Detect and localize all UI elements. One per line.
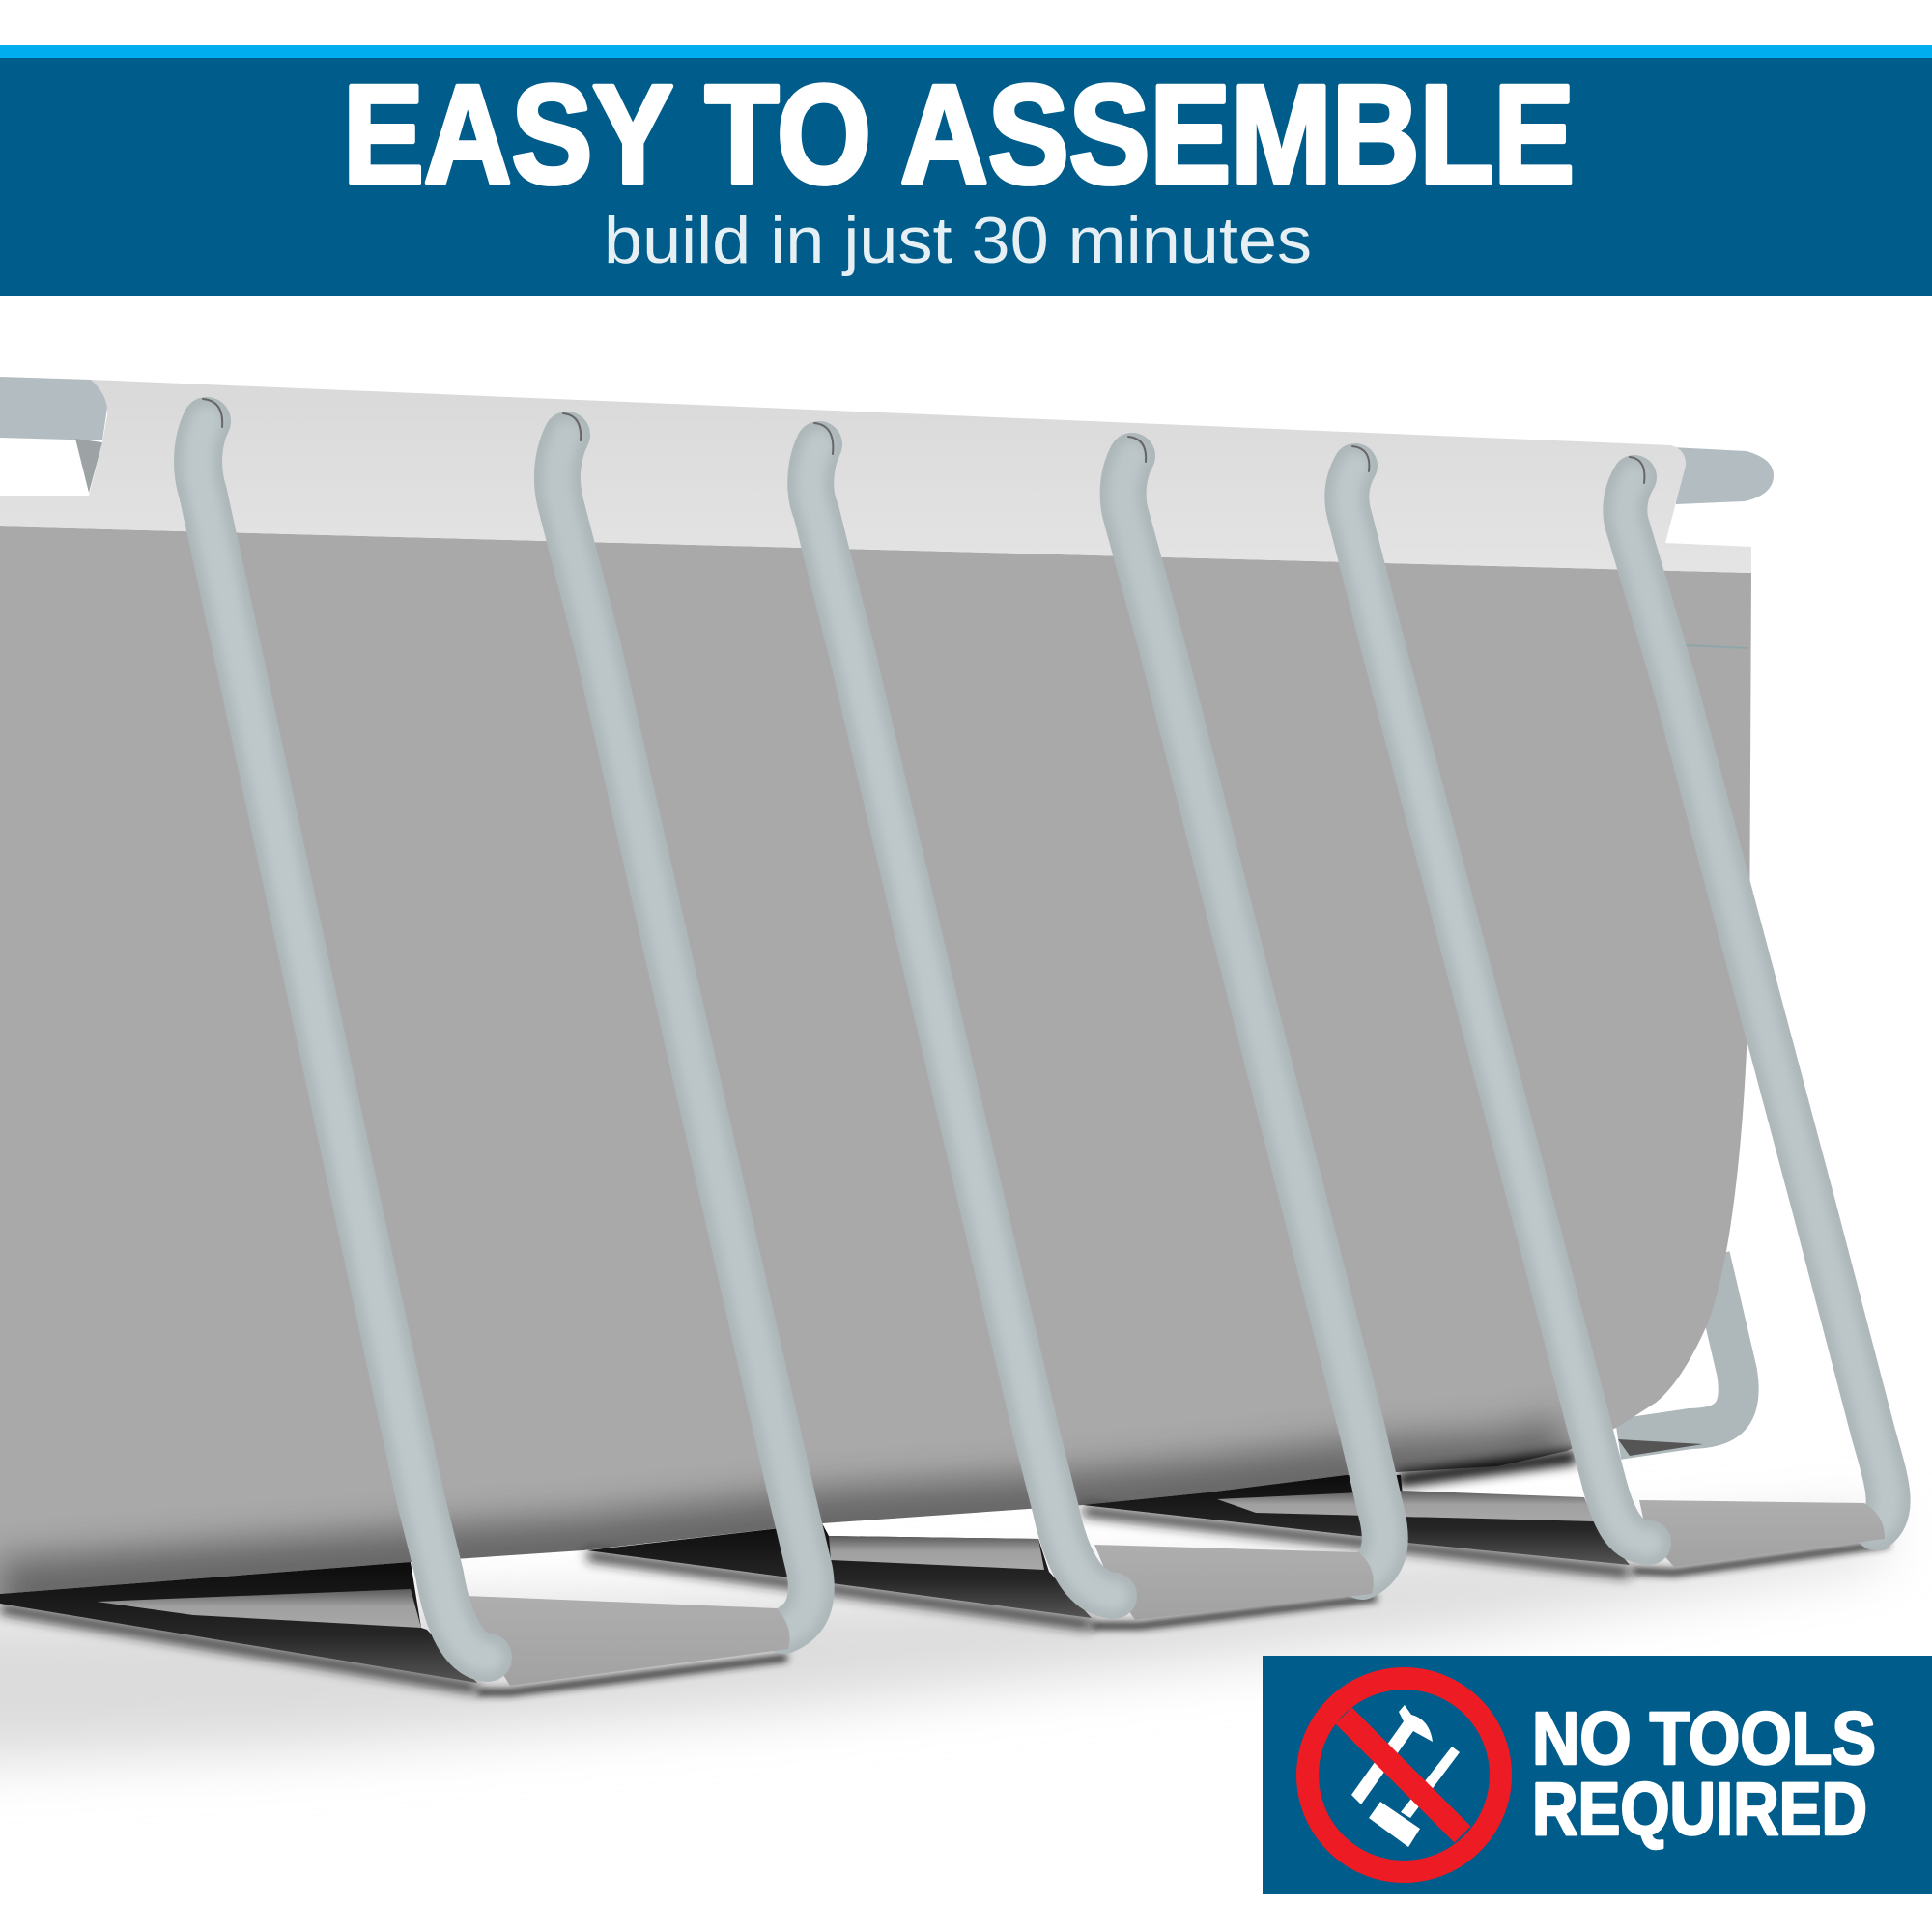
right top rail xyxy=(1671,447,1774,504)
frame B xyxy=(810,423,1385,1620)
icon: prohibition sign xyxy=(1308,1679,1501,1872)
pool illustration xyxy=(0,377,1889,1692)
leg C left xyxy=(1347,446,1649,1543)
frame A xyxy=(198,399,811,1686)
left top rail xyxy=(0,377,107,493)
badge text xyxy=(1532,1697,1876,1851)
foot strap B xyxy=(1094,1545,1374,1620)
wall fold line xyxy=(1684,645,1748,648)
leg B right xyxy=(1123,437,1385,1577)
header banner xyxy=(0,56,1932,296)
top accent strip xyxy=(0,45,1932,58)
icon: hammer and mallet xyxy=(1351,1705,1460,1847)
leg A right xyxy=(557,413,811,1631)
frame C xyxy=(1347,446,1889,1567)
badge: no tools required xyxy=(1263,1656,1932,1894)
foot strap A xyxy=(466,1596,790,1686)
leg B left xyxy=(810,423,1114,1596)
pool wall xyxy=(0,526,1751,1594)
rear corner leg xyxy=(1618,1256,1739,1439)
title: EASY TO ASSEMBLE xyxy=(343,56,1575,213)
subtitle: build in just 30 minutes xyxy=(604,204,1312,277)
badge text: NO TOOLS xyxy=(1532,1697,1876,1780)
shadow band behind wall right xyxy=(1397,1457,1577,1480)
foot strap C xyxy=(1639,1500,1885,1567)
rear strap dark underside xyxy=(1618,1439,1703,1456)
white top band xyxy=(0,380,1751,573)
rear straps C xyxy=(1083,1475,1889,1573)
leg C right xyxy=(1625,457,1889,1528)
badge text: REQUIRED xyxy=(1532,1768,1867,1851)
ground shadow xyxy=(0,1517,1884,1768)
wall bottom shading xyxy=(0,1451,1567,1594)
rear straps B xyxy=(587,1523,1377,1626)
rear straps A xyxy=(0,1562,787,1692)
leg A left xyxy=(198,399,488,1658)
